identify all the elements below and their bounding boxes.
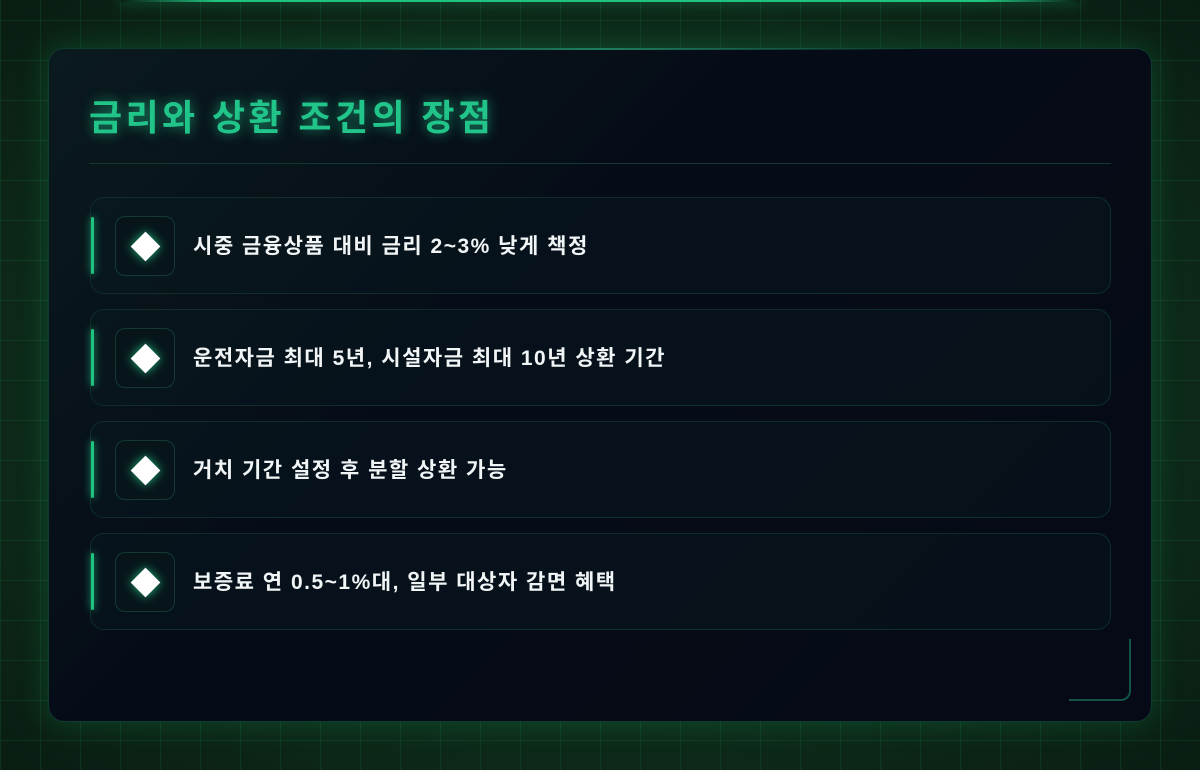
item 2 bbox=[90, 309, 1111, 406]
item 3 bbox=[90, 421, 1111, 518]
item 4 bbox=[90, 533, 1111, 630]
text: item 2: 운전자금 최대 5년, 시설자금 최대 10년 상환 기간 bbox=[193, 347, 666, 370]
icon: diamond bbox=[115, 552, 175, 612]
text: item 3: 거치 기간 설정 후 분할 상환 가능 bbox=[193, 459, 508, 482]
text: item 1: 시중 금융상품 대비 금리 2~3% 낮게 책정 bbox=[193, 235, 589, 258]
icon: diamond bbox=[115, 328, 175, 388]
title: 금리와 상환 조건의 장점 bbox=[89, 97, 494, 138]
icon: diamond bbox=[115, 216, 175, 276]
icon: diamond bbox=[115, 440, 175, 500]
text: item 4: 보증료 연 0.5~1%대, 일부 대상자 감면 혜택 bbox=[193, 571, 617, 594]
item 1 bbox=[90, 197, 1111, 294]
